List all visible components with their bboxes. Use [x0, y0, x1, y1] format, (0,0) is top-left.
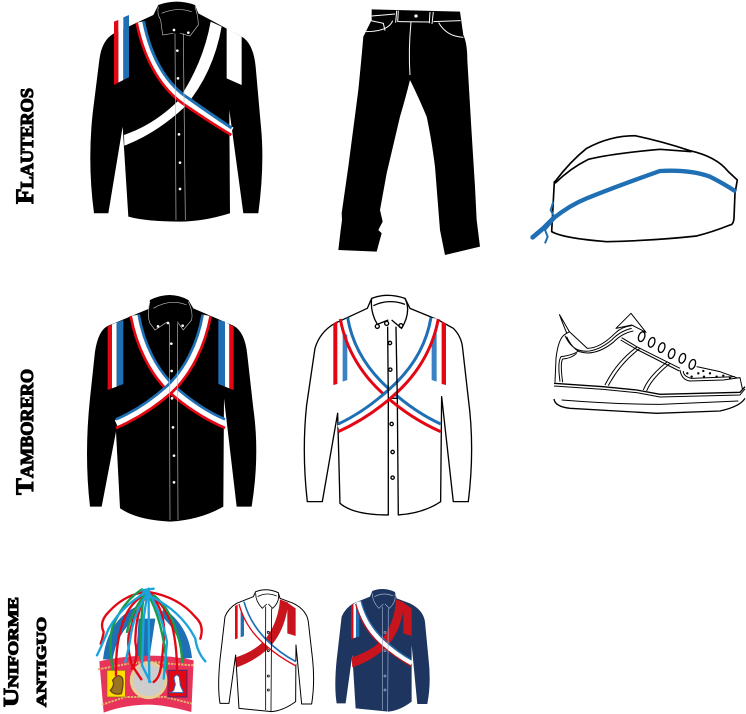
left yellow emblem	[107, 670, 125, 697]
heading: Tamborero: Tamborero	[12, 369, 39, 495]
tamborero white shirt	[304, 295, 472, 515]
centre grey disc	[131, 663, 166, 698]
white sneaker	[554, 313, 745, 413]
right red emblem	[168, 670, 187, 697]
tamborero black shirt	[87, 295, 256, 522]
drum with cords	[97, 589, 205, 713]
drum blue dome	[103, 607, 192, 659]
heading: Flauteros: Flauteros	[12, 88, 39, 204]
antique navy shirt	[335, 589, 430, 712]
flautero black shirt	[90, 2, 262, 222]
cords	[97, 589, 205, 682]
antique white shirt	[219, 590, 314, 712]
hat with blue band	[533, 136, 737, 243]
black trousers	[338, 9, 480, 255]
heading: Uniforme antiguo: antiguo	[29, 617, 51, 707]
heading: Uniforme antiguo	[0, 597, 51, 707]
drum red band	[99, 656, 194, 713]
